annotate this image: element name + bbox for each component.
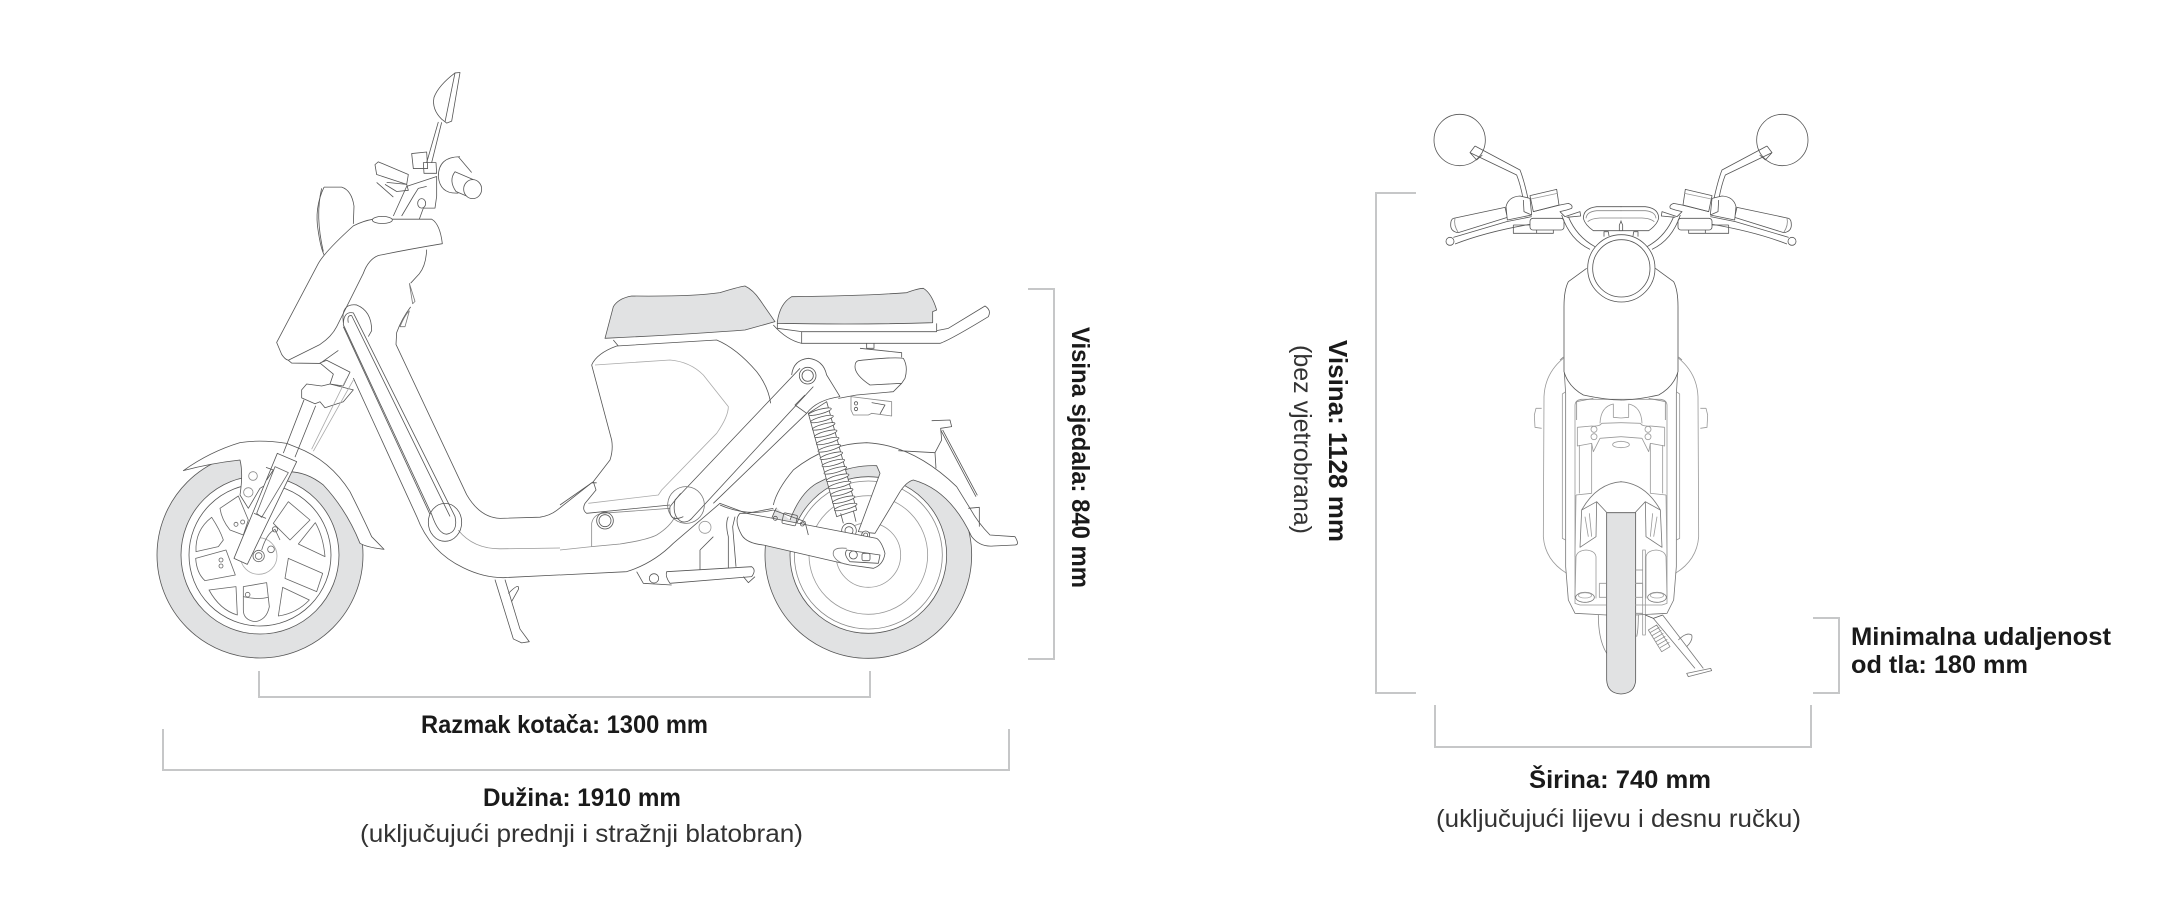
note: width: (uključujući lijevu i desnu ručku) (1436, 805, 1801, 833)
front view scooter illustration (1434, 114, 1808, 694)
front wheel (157, 452, 363, 658)
swingarm and center stand (637, 505, 885, 585)
side view scooter illustration (157, 73, 1017, 658)
note: length: (uključujući prednji i stražnji blatobran) (360, 820, 803, 848)
label: length: Dužina: 1910 mm (483, 784, 681, 812)
bracket: length (163, 729, 1009, 770)
front wheel and stand (1598, 513, 1712, 694)
headlight (1588, 235, 1655, 302)
rear shock absorber (808, 402, 858, 538)
frame strut and pivot (660, 358, 892, 531)
bracket: total height (1376, 193, 1416, 693)
body shell, frame and kickstand (277, 73, 597, 643)
battery and seats (560, 286, 989, 575)
note: total height: (bez vjetrobrana) (1288, 345, 1316, 534)
rear fender and tail bracket (773, 420, 1017, 546)
bracket: seat height (1028, 289, 1054, 659)
bracket: width (1435, 705, 1811, 747)
front fender and fork (183, 441, 384, 564)
rear wheel (765, 452, 972, 658)
label: ground clearance: Minimalna udaljenost (1851, 623, 2112, 651)
label: ground clearance: od tla: 180 mm (1851, 651, 2028, 679)
bracket: wheelbase (259, 671, 870, 697)
front shield, forks and handlebars (left side) (1434, 114, 1622, 615)
label: total height: Visina: 1128 mm (1323, 340, 1353, 542)
label: wheelbase: Razmak kotača: 1300 mm (421, 711, 708, 739)
label: seat height: Visina sjedala: 840 mm (1066, 327, 1094, 588)
label: ground clearance (1851, 623, 2112, 679)
label: width: Širina: 740 mm (1529, 764, 1711, 794)
bracket: ground clearance (1813, 618, 1839, 693)
front shield, forks and handlebars (right side) (1620, 114, 1808, 615)
